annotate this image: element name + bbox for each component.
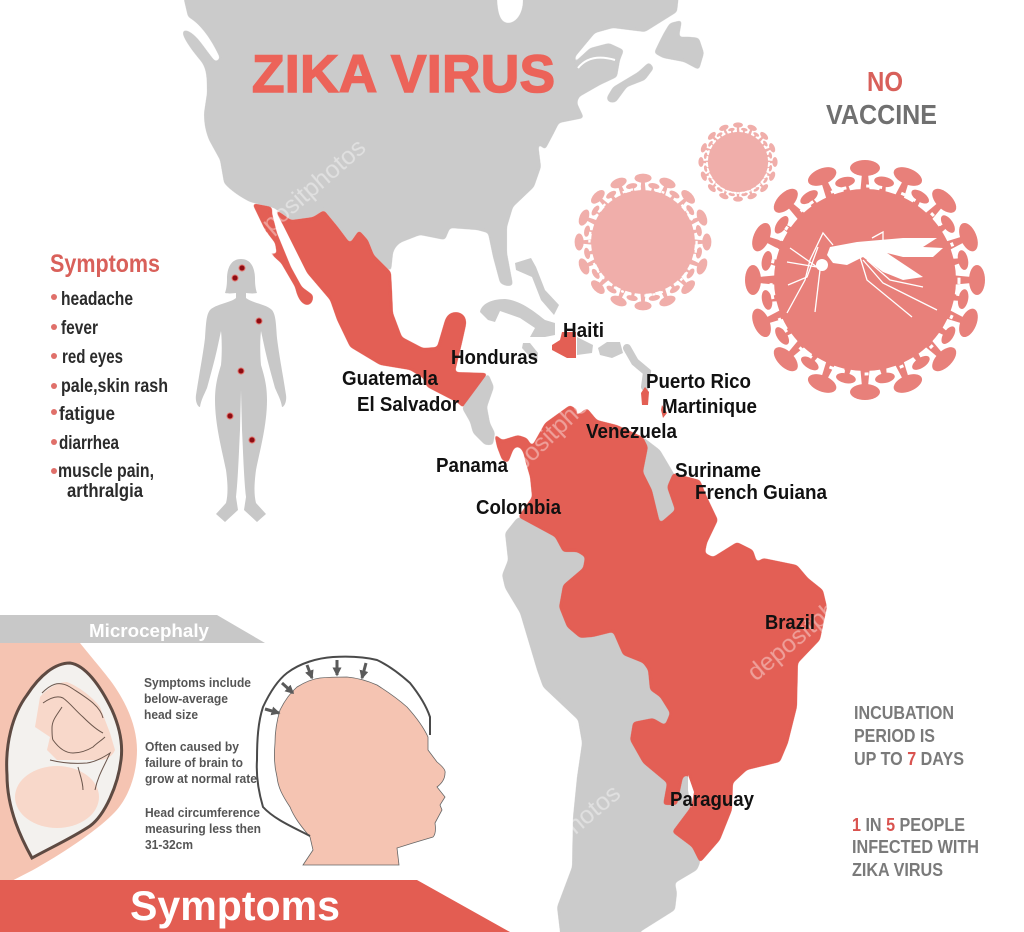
- microcephaly description: Often caused by: [145, 739, 240, 754]
- watermarks: depositphotos: [742, 565, 879, 687]
- icon: large virus with mosquito: [745, 160, 985, 400]
- map: Martinique: [661, 405, 667, 418]
- icon: mosquito: [787, 232, 943, 317]
- map: affected South America: [494, 405, 827, 863]
- heading: symptoms: Symptoms: [50, 250, 160, 278]
- country labels: Haiti: [563, 320, 604, 342]
- country labels: Panama: [436, 455, 509, 477]
- list of symptoms: red eyes: [62, 347, 123, 368]
- microcephaly description: Head circumference: [145, 805, 260, 820]
- country labels: French Guiana: [695, 482, 828, 504]
- watermarks: depositphotos: [487, 368, 618, 496]
- microcephaly description: Symptoms include: [144, 675, 251, 690]
- watermarks: depositphotos: [234, 565, 371, 687]
- illustration: infant head profile: [257, 657, 445, 865]
- microcephaly description: measuring less then: [145, 821, 261, 836]
- map: North America: [183, 0, 704, 286]
- infection rate note: [852, 815, 979, 880]
- panel: symptoms list: [50, 250, 168, 502]
- microcephaly description: head size: [144, 707, 198, 722]
- country labels: Brazil: [765, 612, 815, 634]
- country labels: Guatemala: [342, 368, 439, 390]
- country labels: Martinique: [662, 396, 757, 418]
- infection rate note: ZIKA VIRUS: [852, 860, 943, 880]
- list of symptoms: [51, 289, 168, 502]
- incubation period note: [854, 703, 964, 769]
- list of symptoms: pale,skin rash: [61, 376, 168, 397]
- map: Haiti: [552, 332, 576, 358]
- map: Mexico and Baja: [252, 203, 488, 408]
- country labels: Puerto Rico: [646, 371, 751, 393]
- country labels: Venezuela: [586, 421, 678, 443]
- map of the Americas: [183, 0, 827, 932]
- watermarks: depositphotos: [236, 133, 371, 257]
- microcephaly description: 31-32cm: [145, 837, 193, 852]
- list of symptoms: headache: [61, 289, 133, 310]
- country labels: [342, 320, 828, 811]
- list of symptoms: fever: [61, 318, 98, 339]
- country labels: El Salvador: [357, 394, 459, 416]
- map: Central America: [462, 373, 495, 445]
- list of symptoms: fatigue: [59, 404, 115, 425]
- map: Paraguay sliver: [688, 775, 694, 808]
- country labels: Colombia: [476, 497, 562, 519]
- list of symptoms: diarrhea: [59, 433, 119, 454]
- infection rate note: 1 IN 5 PEOPLE: [852, 815, 965, 835]
- map: Caribbean islands: [480, 258, 647, 387]
- icon: human body with pain points: [196, 259, 286, 522]
- map: Puerto Rico: [641, 387, 649, 405]
- watermarks: [0, 133, 879, 901]
- no vaccine callout: NO: [867, 66, 903, 97]
- microcephaly banner: Microcephaly: [89, 621, 209, 641]
- map: South America land: [502, 437, 700, 932]
- watermarks: depositphotos: [489, 779, 626, 901]
- country labels: Suriname: [675, 460, 761, 482]
- microcephaly banner: [0, 615, 265, 643]
- microcephaly description: below-average: [144, 691, 228, 706]
- no vaccine callout: [826, 66, 937, 130]
- illustration: fetus in womb: [0, 643, 137, 887]
- list of symptoms: arthralgia: [67, 481, 143, 502]
- icon: medium virus: [575, 174, 711, 310]
- infection rate note: INFECTED WITH: [852, 837, 979, 857]
- microcephaly description: failure of brain to: [145, 755, 243, 770]
- map: Gulf of St Lawrence gap: [578, 58, 615, 68]
- skull outline: [257, 657, 430, 836]
- bottom symptoms banner: [0, 880, 510, 932]
- country labels: Honduras: [451, 347, 538, 369]
- bottom symptoms banner: Symptoms: [130, 882, 340, 929]
- incubation period note: UP TO 7 DAYS: [854, 749, 964, 769]
- title: ZIKA VIRUS: [252, 45, 555, 104]
- panel: microcephaly: [0, 615, 445, 887]
- no vaccine callout: VACCINE: [826, 99, 937, 130]
- incubation period note: INCUBATION: [854, 703, 954, 723]
- compression arrows: [265, 660, 366, 713]
- country labels: Paraguay: [670, 789, 755, 811]
- incubation period note: PERIOD IS: [854, 726, 935, 746]
- list of symptoms: muscle pain,: [58, 461, 154, 482]
- microcephaly description: grow at normal rate: [145, 771, 257, 786]
- microcephaly description: [144, 675, 261, 852]
- icon: small virus: [698, 122, 778, 202]
